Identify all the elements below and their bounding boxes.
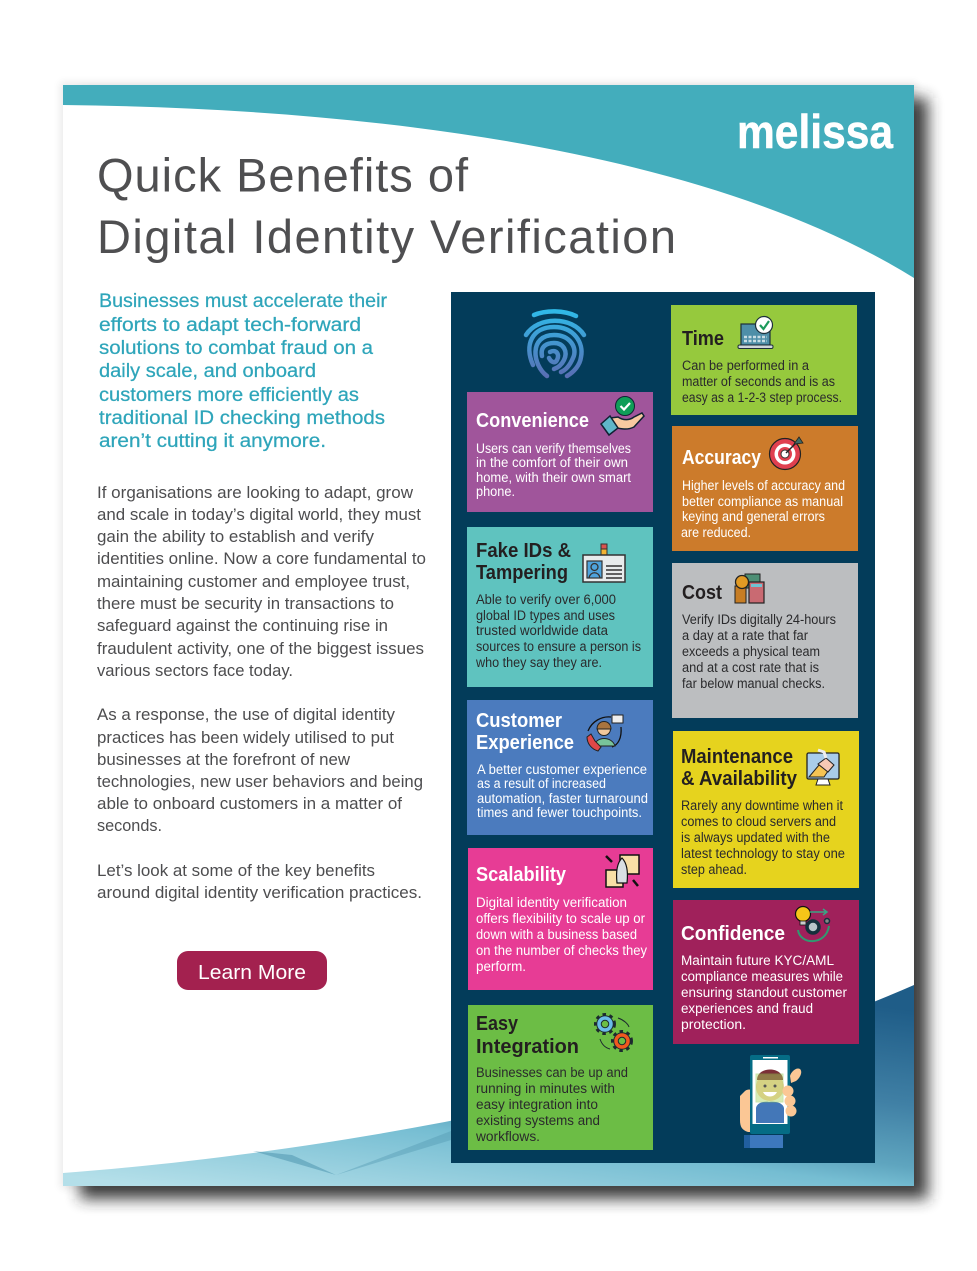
panel: easy integration: Integration <box>476 1036 579 1058</box>
panel: fake ids and tampering <box>467 527 653 687</box>
title: Quick Benefits of <box>97 148 469 202</box>
panel: confidence: compliance measures while <box>681 969 843 984</box>
panel: confidence: Maintain future KYC/AML <box>681 953 834 968</box>
title <box>97 148 676 263</box>
panel: time: Can be performed in a <box>682 358 810 373</box>
panel: accuracy: better compliance as manual <box>682 494 843 509</box>
body paragraph 3: around digital identity verification practices. <box>97 883 422 902</box>
panel: scalability: Digital identity verification <box>476 895 627 910</box>
panel: cost: Cost <box>682 582 722 604</box>
panel: easy integration: Businesses can be up and <box>476 1065 628 1080</box>
panel: confidence <box>673 900 859 1044</box>
panel: maintenance and availability: & Availability <box>681 768 798 790</box>
panel: customer experience: A better customer experience <box>477 762 647 777</box>
panel: time: easy as a 1-2-3 step process. <box>682 390 842 405</box>
body paragraph 1: fraudulent activity, one of the biggest issues <box>97 639 424 658</box>
panel: time: matter of seconds and is as <box>682 374 835 389</box>
top teal header wave <box>63 85 914 278</box>
panel: fake ids and tampering: Tampering <box>476 562 568 584</box>
body paragraph 2: businesses at the forefront of new <box>97 750 351 769</box>
panel: easy integration: existing systems and <box>476 1113 600 1128</box>
bottom blue wave <box>63 985 914 1186</box>
panel: easy integration: Easy <box>476 1013 519 1035</box>
panel: customer experience: automation, faster turnaround <box>477 791 648 806</box>
body paragraph 2: practices has been widely utilised to put <box>97 728 394 747</box>
panel: accuracy: Accuracy <box>682 447 762 469</box>
panel: time <box>671 305 857 415</box>
title: Digital Identity Verification <box>97 210 676 263</box>
page drop shadow <box>60 82 928 1199</box>
body paragraph 1: gain the ability to establish and verify <box>97 527 375 546</box>
panel: accuracy: keying and general errors <box>682 509 825 524</box>
panel: scalability: offers flexibility to scale up or <box>476 911 646 926</box>
panel: easy integration: running in minutes with <box>476 1081 615 1096</box>
panel: fake ids and tampering: Fake IDs & <box>476 540 571 562</box>
panel: maintenance and availability: comes to cloud servers and <box>681 814 836 829</box>
body paragraph 1: various sectors face today. <box>97 661 293 680</box>
body paragraph 2: seconds. <box>97 816 162 835</box>
panel: easy integration: workflows. <box>475 1129 540 1144</box>
icon: hand with check <box>601 396 644 435</box>
panel: customer experience: Customer <box>476 710 562 732</box>
panel: maintenance and availability: latest technology to stay one <box>681 846 845 861</box>
panel: customer experience: Experience <box>476 732 574 754</box>
icon: money and calculator <box>735 574 764 603</box>
body paragraph 2: technologies, new user behaviors and being <box>97 772 423 791</box>
panel: scalability: perform. <box>476 959 526 974</box>
panel: cost: exceeds a physical team <box>682 644 820 659</box>
panel: fake ids and tampering: who they say they are. <box>475 655 602 670</box>
intro text block: traditional ID checking methods <box>99 407 385 429</box>
panel: cost: Verify IDs digitally 24-hours <box>682 612 836 627</box>
panel: convenience: phone. <box>476 484 515 499</box>
body paragraph 3 <box>97 861 422 902</box>
body paragraph 2 <box>97 705 423 835</box>
panel: customer experience: times and fewer touchpoints. <box>477 805 642 820</box>
panel: accuracy <box>672 426 858 551</box>
icon: rocket with boxes <box>606 855 639 887</box>
body paragraph 2: able to onboard customers in a matter of <box>97 794 402 813</box>
panel: confidence: ensuring standout customer <box>681 985 848 1000</box>
icon: monitor with wrench <box>807 750 839 785</box>
icon: id badge <box>583 544 625 582</box>
intro text block: efforts to adapt tech-forward <box>99 314 361 336</box>
melissa logo: melissa <box>737 105 894 158</box>
panel: scalability: Scalability <box>476 864 567 886</box>
panel: cost: and at a cost rate that is <box>682 660 819 675</box>
body paragraph 1 <box>97 483 426 680</box>
panel: maintenance and availability: Maintenance <box>681 746 793 768</box>
panel: fake ids and tampering: trusted worldwide data <box>476 623 609 638</box>
body paragraph 1: there must be security in transactions to <box>97 594 394 613</box>
panel: convenience: Users can verify themselves <box>476 441 631 456</box>
panel: convenience: home, with their own smart <box>476 470 631 485</box>
panel: cost: far below manual checks. <box>682 676 825 691</box>
intro text block: solutions to combat fraud on a <box>99 337 373 359</box>
body paragraph 1: and scale in today’s digital world, they must <box>97 505 421 524</box>
panel: cost <box>672 563 858 718</box>
panel: customer experience: as a result of increased <box>477 776 606 791</box>
icon: support agent <box>587 715 623 751</box>
panel: scalability <box>468 848 653 990</box>
panel: fake ids and tampering: Able to verify over 6,000 <box>476 592 616 607</box>
panel: time: Time <box>682 328 724 350</box>
button: learn more: Learn More <box>198 961 306 984</box>
panel: customer experience <box>467 700 653 835</box>
intro text block: customers more efficiently as <box>99 384 359 406</box>
panel: easy integration <box>468 1005 653 1150</box>
panel: accuracy: are reduced. <box>681 525 751 540</box>
intro text block <box>99 290 387 452</box>
panel: convenience: in the comfort of their own <box>476 455 628 470</box>
page background <box>63 85 914 1186</box>
panel: fake ids and tampering: sources to ensure a person is <box>476 639 641 654</box>
icon: gears <box>596 1014 632 1050</box>
panel: scalability: down with a business based <box>476 927 637 942</box>
panel: maintenance and availability: is always updated with the <box>681 830 830 845</box>
panel: maintenance and availability <box>673 731 859 888</box>
panel: accuracy: Higher levels of accuracy and <box>682 478 845 493</box>
icon: fingerprint <box>526 311 584 376</box>
panel: convenience <box>467 392 653 512</box>
panel: maintenance and availability: Rarely any downtime when it <box>681 798 843 813</box>
icon: target <box>770 437 803 470</box>
panel: cost: a day at a rate that far <box>682 628 809 643</box>
intro text block: daily scale, and onboard <box>99 360 316 382</box>
body paragraph 1: maintaining customer and employee trust, <box>97 572 410 591</box>
button: learn more <box>177 951 327 990</box>
panel: confidence: Confidence <box>681 923 785 945</box>
panel: easy integration: easy integration into <box>476 1097 598 1112</box>
panel: maintenance and availability: step ahead. <box>681 862 747 877</box>
body paragraph 3: Let’s look at some of the key benefits <box>97 861 375 880</box>
panel: benefits background <box>451 292 875 1163</box>
panel: scalability: on the number of checks they <box>476 943 647 958</box>
body paragraph 1: safeguard against the continuing rise in <box>97 616 388 635</box>
panel: fake ids and tampering: global ID types and uses <box>476 608 615 623</box>
icon: lightbulb and gears <box>796 906 830 941</box>
panel: confidence: protection. <box>681 1017 746 1032</box>
intro text block: aren’t cutting it anymore. <box>99 430 326 452</box>
body paragraph 2: As a response, the use of digital identity <box>97 705 396 724</box>
icon: phone with face scan <box>740 1055 801 1148</box>
panel: confidence: experiences and fraud <box>681 1001 813 1016</box>
icon: laptop with clock <box>738 316 773 348</box>
panel: convenience: Convenience <box>476 410 589 432</box>
body paragraph 1: identities online. Now a core fundamental to <box>97 549 426 568</box>
body paragraph 1: If organisations are looking to adapt, grow <box>97 483 414 502</box>
intro text block: Businesses must accelerate their <box>99 290 387 312</box>
